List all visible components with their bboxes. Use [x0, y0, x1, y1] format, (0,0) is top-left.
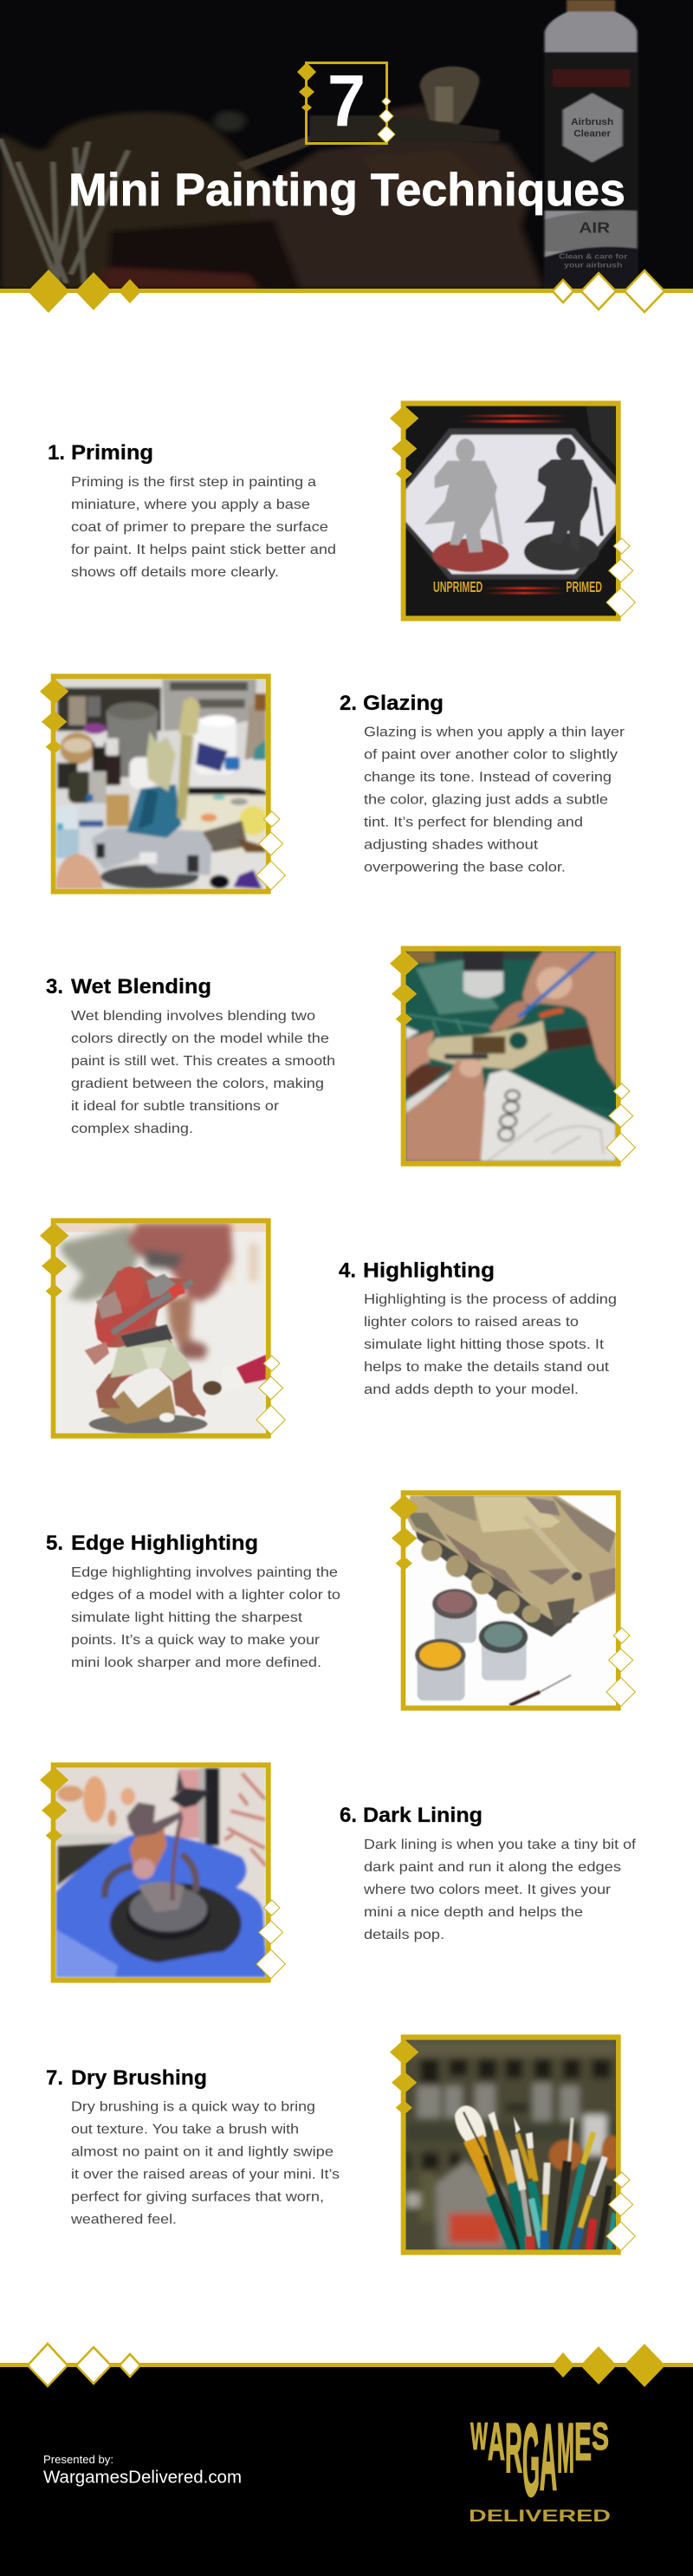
text block: mini a nice depth and helps the [364, 1905, 583, 1920]
text block: helps to make the details stand out [364, 1360, 610, 1375]
header divider with diamonds [0, 270, 693, 313]
text block [363, 1838, 637, 1942]
text block: colors directly on the model while the [71, 1031, 329, 1046]
header photo: airbrush and cleaner bottle [0, 0, 693, 289]
text block: Highlighting is the process of adding [364, 1292, 617, 1307]
text block: Priming is the first step in painting a [71, 475, 316, 490]
heading: 1. [48, 441, 65, 465]
text block: it over the raised areas of your mini. It’s [71, 2167, 340, 2182]
heading: Priming [71, 441, 153, 465]
text block: the color, glazing just adds a subtle [364, 792, 608, 808]
text block: weathered feel. [70, 2212, 177, 2228]
footer [0, 2344, 693, 2576]
text block: and adds depth to your model. [364, 1382, 579, 1397]
logo: R [505, 2409, 522, 2488]
text block: almost no paint on it and lightly swipe [71, 2144, 334, 2160]
text block: shows off details more clearly. [71, 565, 279, 580]
photo: hands painting a model [390, 940, 635, 1174]
panel: highlighting [40, 1212, 617, 1446]
bottle label text: your airbrush [564, 262, 623, 270]
text block: of paint over another color to slightly [364, 747, 618, 763]
text block: miniature, where you apply a base [71, 498, 310, 512]
text block: Wet blending involves blending two [71, 1009, 315, 1024]
logo: A [488, 2412, 505, 2471]
photo labels [433, 582, 602, 592]
photo labels: PRIMED [566, 578, 602, 595]
panel: dark lining [40, 1756, 637, 1990]
text block: out texture. You take a brush with [71, 2122, 299, 2137]
text block: Dry brushing is a quick way to bring [71, 2099, 315, 2115]
text block: edges of a model with a lighter color to [71, 1588, 340, 1603]
photo labels: UNPRIMED [433, 578, 483, 595]
text block: gradient between the colors, making [71, 1077, 324, 1091]
photo: brushes in a jar [390, 2028, 635, 2262]
panel: priming [48, 394, 635, 628]
bottle label text: Cleaner [573, 128, 611, 139]
text block [71, 1009, 335, 1136]
text block: where two colors meet. It gives your [363, 1883, 612, 1897]
presented by: Presented by: [43, 2453, 113, 2466]
heading: Edge Highlighting [71, 1532, 258, 1555]
panel: wet blending [46, 940, 635, 1174]
text block: paint is still wet. This creates a smooth [71, 1054, 335, 1069]
text block: Dark lining is when you take a tiny bit of [364, 1838, 637, 1852]
number badge [297, 60, 395, 144]
number 7: 7 [327, 60, 366, 141]
text block [364, 725, 625, 875]
text block: coat of primer to prepare the surface [71, 520, 328, 535]
text block: simulate light hitting the sharpest [71, 1610, 303, 1625]
text block: Edge highlighting involves painting the [71, 1565, 338, 1580]
text block: adjusting shades without [364, 837, 539, 853]
text block: for paint. It helps paint stick better and [71, 543, 336, 557]
footer divider with diamonds [0, 2344, 693, 2387]
text block: dark paint and run it along the edges [364, 1860, 621, 1875]
text block [364, 1292, 617, 1397]
text block: change its tone. Instead of covering [364, 770, 612, 785]
text block: simulate light hitting those spots. It [364, 1337, 605, 1352]
text block: overpowering the base color. [364, 860, 566, 875]
heading: Wet Blending [71, 975, 211, 999]
heading: Dark Lining [363, 1804, 483, 1827]
logo: G [522, 2403, 540, 2517]
text block: tint. It’s perfect for blending and [364, 815, 583, 830]
photo: miniature held in blue glove [40, 1756, 285, 1990]
logo: A [540, 2404, 557, 2509]
text block: details pop. [364, 1928, 444, 1942]
text block: points. It’s a quick way to make your [71, 1633, 321, 1648]
logo: S [592, 2415, 609, 2458]
heading: 2. [340, 692, 357, 715]
text block [71, 1565, 340, 1670]
header banner [0, 0, 693, 313]
text block: Glazing is when you apply a thin layer [364, 725, 625, 740]
photo: red-skinned miniature with tufts [40, 1212, 285, 1446]
heading: 3. [46, 975, 63, 999]
logo: W [470, 2415, 488, 2458]
title: Mini Painting Techniques [68, 165, 625, 216]
bottle label text: Airbrush [571, 117, 613, 127]
logo: DELIVERED [469, 2508, 611, 2526]
text block: mini look sharper and more defined. [71, 1656, 321, 1670]
logo [469, 2403, 611, 2526]
text block [70, 2099, 340, 2228]
bottle label text: AIR [579, 219, 610, 237]
logo: M [557, 2409, 574, 2488]
heading: 5. [46, 1532, 63, 1555]
heading: Dry Brushing [71, 2066, 207, 2090]
panel: dry brushing [46, 2028, 635, 2262]
text block: complex shading. [71, 1122, 193, 1136]
panel: edge highlighting [46, 1484, 635, 1718]
website: WargamesDelivered.com [43, 2469, 242, 2488]
text block [71, 475, 336, 580]
heading: Highlighting [363, 1259, 495, 1283]
photo: model tank and paint tins [390, 1484, 635, 1718]
text block: it ideal for subtle transitions or [71, 1099, 280, 1114]
photo: unprimed and primed miniatures [390, 394, 635, 628]
logo: E [574, 2412, 592, 2471]
heading: 7. [46, 2066, 63, 2090]
panel: glazing [40, 667, 625, 901]
bottle label text [559, 117, 628, 270]
heading: 6. [340, 1804, 357, 1827]
photo: painting bench with miniature [40, 667, 285, 901]
heading: Glazing [363, 692, 444, 715]
text block: perfect for giving surfaces that worn, [71, 2189, 324, 2205]
bottle label text: Clean & care for [559, 253, 628, 261]
text block: lighter colors to raised areas to [364, 1315, 579, 1330]
heading: 4. [339, 1259, 356, 1283]
